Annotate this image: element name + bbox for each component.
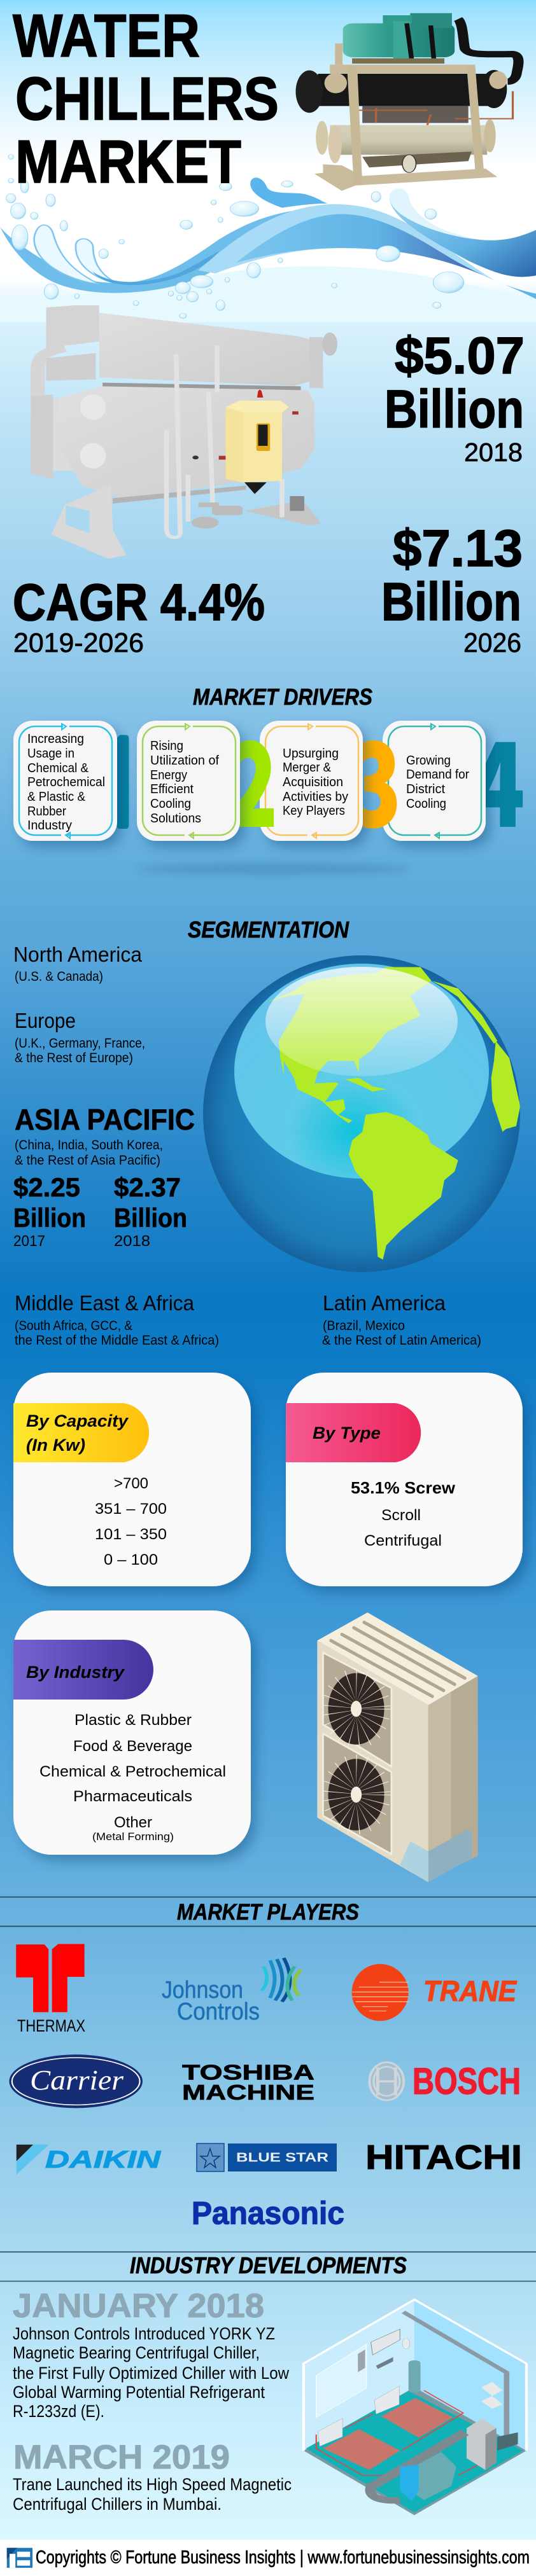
Asia Pacific value 2017 — [13, 1172, 86, 1250]
development: March 2019 — [13, 2439, 292, 2514]
card 4: Growing — [406, 754, 451, 768]
section bar: market players: MARKET PLAYERS — [177, 1900, 359, 1925]
panel: by industry: Plastic & Rubber — [74, 1712, 192, 1729]
number 3: 3 — [349, 693, 401, 860]
panel: by industry: Chemical & Petrochemical — [39, 1763, 226, 1780]
card 2: Efficient — [150, 782, 194, 796]
label band: by industry: By Industry — [26, 1663, 125, 1682]
card 1: Rubber — [27, 805, 66, 819]
logo: Daikin — [17, 2145, 162, 2175]
panel: by industry: Pharmaceuticals — [73, 1788, 192, 1805]
region: Asia Pacific: & the Rest of Asia Pacific) — [15, 1153, 160, 1168]
region: Latin America: & the Rest of Latin America) — [322, 1333, 481, 1348]
title: WATER — [13, 2, 200, 70]
region: North America — [13, 943, 143, 984]
development: January 2018: the First Fully Optimized Chiller with Low — [13, 2364, 289, 2383]
panel: by industry: Food & Beverage — [73, 1738, 192, 1755]
stat: market size 2018: $5.07 — [395, 327, 525, 385]
card 1: Petrochemical — [27, 775, 105, 789]
Asia Pacific value 2017: Billion — [13, 1203, 86, 1233]
panel: by type — [286, 1373, 523, 1586]
card 3: Acquisition — [283, 775, 343, 789]
logo: Carrier — [9, 2054, 143, 2108]
card 2 — [137, 721, 240, 841]
development: March 2019: Centrifugal Chillers in Mumbai. — [13, 2495, 222, 2514]
label band: by capacity — [13, 1403, 149, 1462]
panel: by type: 53.1% Screw — [351, 1478, 456, 1497]
region: Europe: Europe — [15, 1009, 76, 1032]
stat: market size 2026: $7.13 — [393, 520, 523, 578]
development: January 2018 — [13, 2287, 289, 2421]
logo: Trane — [352, 1964, 518, 2021]
logo: Panasonic: Panasonic — [192, 2196, 344, 2231]
region: Europe — [15, 1009, 145, 1065]
logo: Blue Star: BLUE STAR — [236, 2151, 329, 2165]
label band: by capacity: (In Kw) — [26, 1436, 85, 1455]
panel: by type: Centrifugal — [364, 1532, 442, 1549]
panel: by type: Scroll — [381, 1507, 421, 1524]
card 2: Energy — [150, 768, 187, 782]
panel: by capacity: 0 – 100 — [104, 1551, 158, 1568]
card 4 — [383, 721, 486, 841]
continent: South America — [349, 1112, 458, 1259]
region: Asia Pacific — [13, 1103, 195, 1250]
card 2: Cooling — [150, 797, 191, 811]
logo: Hitachi: HITACHI — [365, 2138, 522, 2177]
card 4: Demand for — [406, 768, 469, 782]
logo: Trane: TRANE — [423, 1975, 518, 2007]
stat: CAGR: 2019-2026 — [13, 628, 144, 658]
stat: market size 2018 — [384, 327, 525, 467]
card 1: Increasing — [27, 732, 84, 746]
stat: CAGR — [13, 574, 265, 658]
Asia Pacific value 2018 — [114, 1172, 187, 1250]
islands — [345, 1078, 386, 1091]
card 2: Solutions — [150, 812, 201, 826]
Asia Pacific value 2017: $2.25 — [13, 1172, 80, 1202]
region: Middle East and Africa: (South Africa, GCC, & — [15, 1319, 132, 1333]
number 1: 1 — [95, 727, 146, 844]
label band: by industry — [13, 1640, 153, 1700]
region: Europe: & the Rest of Europe) — [15, 1051, 133, 1065]
title: CHILLERS — [15, 65, 279, 133]
stat: market size 2018: 2018 — [464, 438, 523, 467]
card 1: & Plastic & — [27, 790, 86, 804]
card 1: Usage in — [27, 747, 74, 761]
logo: Thermax: THERMAX — [17, 2016, 85, 2035]
panel: by industry: Other — [114, 1814, 152, 1831]
heading: segmentation: SEGMENTATION — [188, 917, 349, 943]
globe — [203, 955, 520, 1272]
shadow under driver cards — [137, 863, 411, 875]
continent: Africa edge — [491, 1041, 520, 1132]
region: Latin America: Latin America — [323, 1291, 446, 1315]
card 1 — [13, 721, 117, 841]
development: January 2018: Magnetic Bearing Centrifugal Chiller, — [13, 2343, 260, 2362]
Asia Pacific value 2018: Billion — [114, 1203, 187, 1233]
card 2: Rising — [150, 739, 183, 753]
development: January 2018: Johnson Controls Introduced YORK YZ — [13, 2324, 275, 2343]
logo: Johnson Controls: Controls — [177, 1998, 260, 2025]
card 4: District — [406, 782, 445, 796]
illustration: isometric plant room — [304, 2299, 526, 2515]
logo: Johnson Controls: Johnson — [162, 1977, 243, 2004]
stat: market size 2026 — [381, 520, 523, 658]
logo: Thermax — [16, 1944, 85, 2035]
footer logo — [7, 2548, 32, 2568]
label band: by type: By Type — [313, 1423, 381, 1443]
region: Middle East and Africa — [15, 1291, 219, 1348]
card 2: Utilization of — [150, 754, 219, 768]
image: water-cooled screw chiller — [296, 13, 518, 191]
card 3: Merger & — [283, 761, 332, 775]
region: Asia Pacific: ASIA PACIFIC — [15, 1103, 195, 1136]
Asia Pacific value 2018: $2.37 — [114, 1172, 181, 1202]
region: North America: North America — [13, 943, 143, 966]
development: January 2018: JANUARY 2018 — [13, 2287, 264, 2325]
panel: by capacity — [13, 1373, 251, 1586]
continent: Europe edge — [432, 981, 497, 1044]
development: January 2018: R-1233zd (E). — [13, 2402, 104, 2421]
Asia Pacific value 2018: 2018 — [114, 1233, 150, 1250]
panel: by capacity: 101 – 350 — [95, 1526, 167, 1543]
card 3: Key Players — [283, 804, 345, 818]
title — [13, 2, 279, 196]
logo: Toshiba Machine: MACHINE — [182, 2081, 314, 2104]
panel: by capacity: 351 – 700 — [95, 1500, 167, 1518]
region: Middle East and Africa: the Rest of the Middle East & Africa) — [15, 1333, 219, 1348]
panel: by capacity: >700 — [114, 1475, 148, 1492]
card 3: Upsurging — [283, 747, 339, 761]
panel: by industry — [13, 1610, 251, 1855]
title: MARKET — [15, 128, 241, 196]
development: January 2018: Global Warming Potential Refrigerant — [13, 2383, 265, 2402]
logo: Toshiba Machine: TOSHIBA — [182, 2061, 314, 2084]
footer — [0, 2540, 536, 2576]
development: March 2019: Trane Launched its High Speed Magnetic — [13, 2475, 292, 2494]
stat: CAGR: CAGR 4.4% — [13, 574, 265, 632]
number 2: 2 — [227, 693, 278, 860]
card 3: Activities by — [283, 790, 348, 804]
logo: Blue Star — [197, 2143, 337, 2171]
logo: Johnson Controls — [162, 1958, 301, 2025]
card 3 — [260, 721, 363, 841]
heading: market drivers: MARKET DRIVERS — [193, 684, 372, 710]
stat: market size 2026: 2026 — [463, 628, 521, 658]
card 4: Cooling — [406, 797, 446, 811]
logo: Bosch — [369, 2061, 521, 2102]
region: Middle East and Africa: Middle East & Africa — [15, 1291, 195, 1315]
section bar: industry developments: INDUSTRY DEVELOPMENTS — [130, 2252, 407, 2278]
image: absorption chiller — [31, 305, 337, 558]
logo: Carrier: Carrier — [30, 2065, 124, 2096]
panel: by industry: (Metal Forming) — [92, 1831, 174, 1843]
water wave splash — [0, 155, 536, 322]
panel: market drivers — [13, 693, 525, 860]
Asia Pacific value 2017: 2017 — [13, 1233, 45, 1250]
region: North America: (U.S. & Canada) — [15, 969, 103, 984]
region: Europe: (U.K., Germany, France, — [15, 1036, 145, 1051]
card 1: Chemical & — [27, 761, 89, 775]
region: Latin America: (Brazil, Mexico — [323, 1319, 405, 1333]
logo: Daikin: DAIKIN — [45, 2147, 162, 2173]
label band: by capacity: By Capacity — [26, 1411, 129, 1430]
region: Asia Pacific: (China, India, South Korea, — [15, 1138, 163, 1153]
card 1: Industry — [27, 819, 72, 833]
development: March 2019: MARCH 2019 — [13, 2439, 230, 2476]
icon: outdoor air conditioning unit — [317, 1612, 478, 1882]
region: Latin America — [322, 1291, 481, 1348]
logo: Toshiba Machine — [182, 2061, 314, 2104]
label band: by type — [286, 1403, 421, 1462]
continent: North America — [267, 967, 432, 1123]
